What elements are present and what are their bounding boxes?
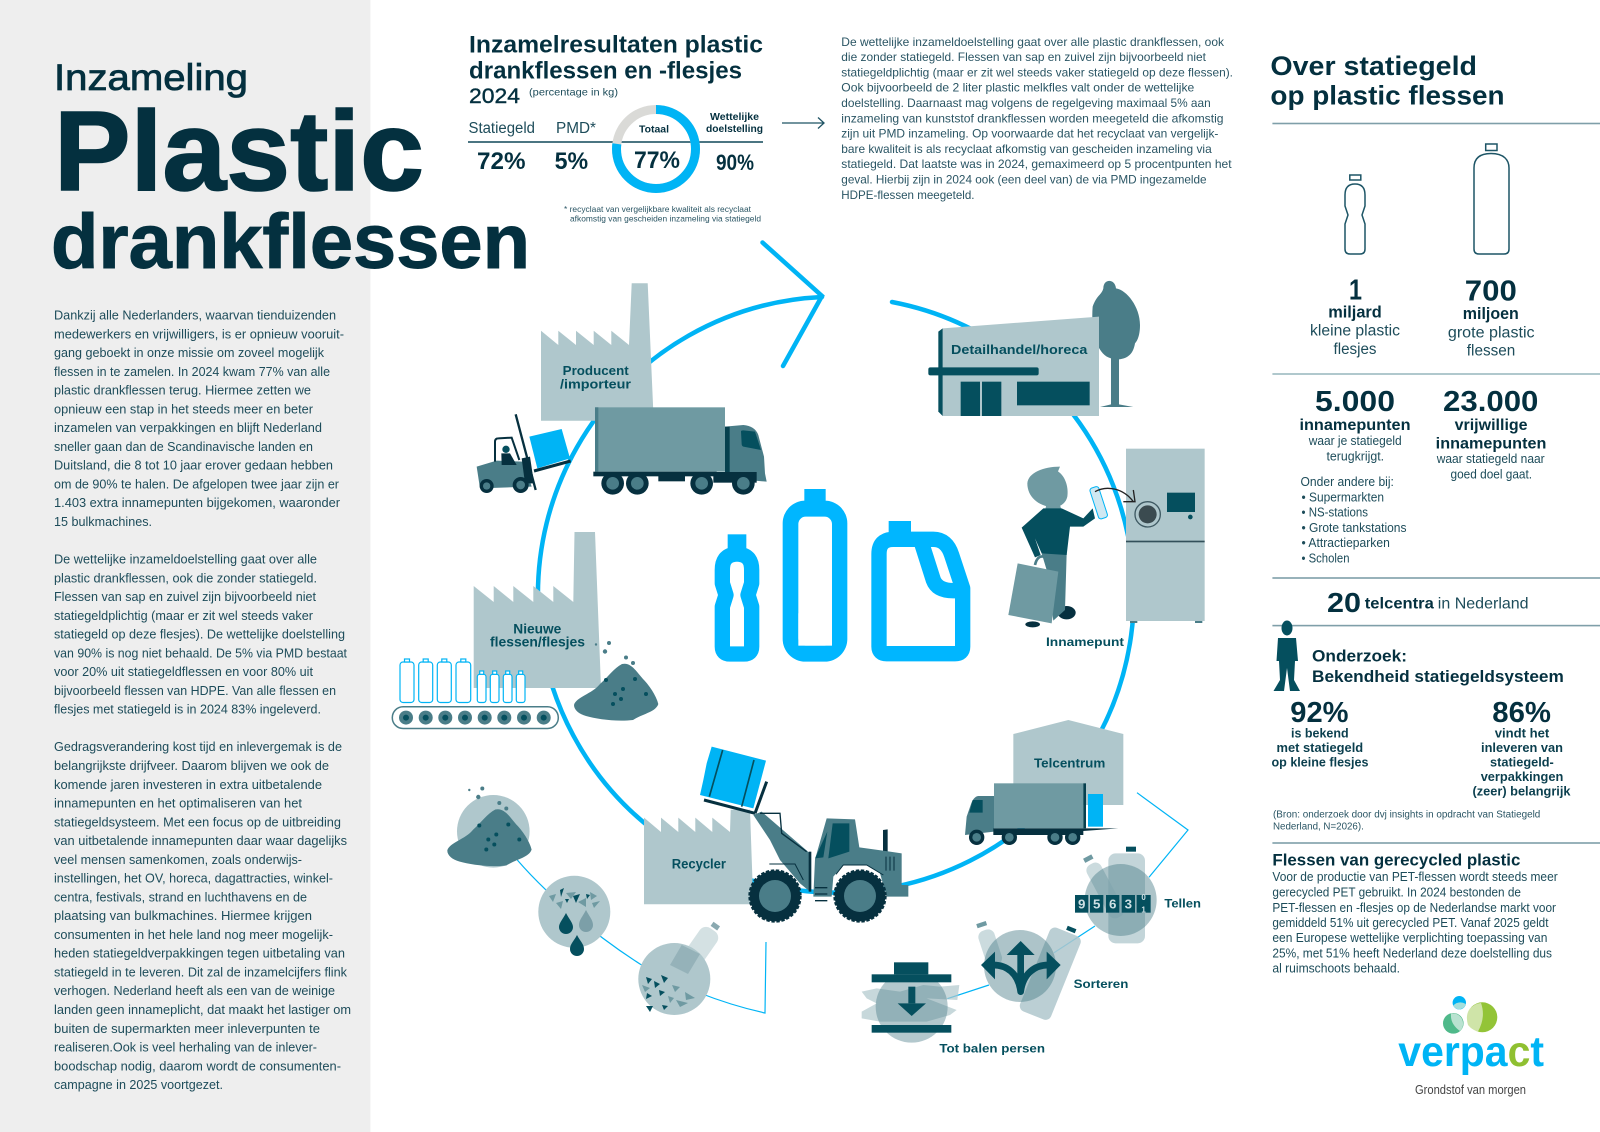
panel: new bottles factory: Nieuwe (513, 622, 562, 636)
text block: legal target explanation: De wettelijke inzameldoelstelling gaat over alle plastic drankflessen, ook (841, 35, 1224, 49)
text block: recycled plastic bottles (1272, 851, 1558, 976)
footnote (564, 204, 761, 223)
icon: counting step: 0 (1141, 893, 1146, 902)
text block: intro article: opnieuw een stap in het steeds meer en beter (54, 401, 314, 416)
text block: intro article: 15 bulkmachines. (54, 514, 152, 529)
icon: baling press step: Tot balen persen (939, 1041, 1045, 1055)
list: where to return: Onder andere bij: (1300, 475, 1394, 489)
text block: intro article: belangrijkste drijfveer. Daarom blijven we ook de (54, 758, 329, 773)
text block: intro article: plastic drankflessen terug. Hiermee zetten we (54, 383, 311, 398)
text block: legal target explanation: bare kwaliteit is als recyclaat afkomstig van gescheiden inzameling via (841, 142, 1212, 156)
panel: producer factory (541, 283, 654, 421)
panel: left grey background (0, 0, 370, 1132)
icon: forklift (477, 414, 571, 493)
text block: intro article: centra, festivals, strand en luchthavens en de (54, 889, 307, 904)
arrow: results to explanation (782, 118, 824, 128)
text block: legal target explanation: doelstelling. Daarnaast mag volgens de regelgeving maximaal 5% aan (841, 96, 1211, 110)
text block: intro article: om de 90% te halen. De afgelopen twee jaar zijn er (54, 476, 340, 491)
footnote: afkomstig van gescheiden inzameling via statiegeld (570, 213, 761, 223)
text block: legal target explanation: statiegeldplichtig (maar er zit wel steeds vaker statiegeld op deze flessen). (841, 65, 1233, 79)
text block: intro article: Flessen van sap en zuivel zijn bijvoorbeeld niet (54, 589, 316, 604)
text block: intro article: innamepunten en het optimaliseren van het (54, 796, 302, 810)
text block: intro article: boodschap nodig, daarom wordt de consumenten- (54, 1058, 341, 1073)
text block: intro article: Gedragsverandering kost tijd en inlevergemak is de (54, 739, 342, 754)
text block: legal target explanation: statiegeld. Dat laatste was in 2024, gemaximeerd op 5 procentpunten het (841, 157, 1232, 171)
icon: baling press step (862, 962, 1045, 1055)
text block: legal target explanation: zijn uit PMD inzameling. Op voorwaarde dat het recyclaat van vergelijk- (841, 127, 1218, 141)
text block: legal target explanation: HDPE-flessen meegeteld. (841, 188, 974, 202)
stat: 1 miljard: flesjes (1334, 341, 1377, 358)
text block: intro article: komende jaren investeren in extra uitbetalende (54, 777, 322, 792)
text block: legal target explanation (841, 35, 1233, 202)
stat: 92%: 92% (1290, 697, 1349, 729)
footnote: * recyclaat van vergelijkbare kwaliteit als recyclaat (564, 204, 752, 214)
icon: person (1274, 620, 1300, 691)
heading: collection results: (percentage in kg) (529, 86, 618, 98)
text block: intro article: statiegeld op deze flesjes). De wettelijke doelstelling (54, 627, 345, 642)
heading: collection results: drankflessen en -flesjes (469, 58, 742, 85)
stat: 86%: verpakkingen (1481, 769, 1563, 784)
text block: recycled plastic bottles: al ruimschoots behaald. (1272, 960, 1400, 976)
stat: 700 miljoen: grote plastic (1448, 324, 1535, 342)
text block: intro article: flessen in te zamelen. In 2024 kwam 77% van alle (54, 364, 330, 379)
stat: 86%: 86% (1492, 697, 1551, 729)
text block: legal target explanation: inzameling van kunststof drankflessen worden meegeteld die afkomstig (841, 111, 1224, 125)
text block: intro article: statiegeld in te leveren. Dit zal de inzamelcijfers flink (54, 964, 348, 980)
stat: 92% (1272, 697, 1368, 770)
text block: recycled plastic bottles: Flessen van gerecycled plastic (1272, 851, 1520, 870)
panel: recycler factory (644, 810, 753, 904)
text block: recycled plastic bottles: een Europese wettelijke verplichting toepassing van (1272, 930, 1547, 945)
source note: Nederland, N=2026). (1273, 822, 1364, 832)
panel: producer factory: Producent (563, 363, 629, 378)
icon: person returning bottle (1008, 467, 1135, 649)
text block: recycled plastic bottles: 25%, met 51% heeft Nederland deze doelstelling dus (1272, 945, 1552, 960)
stat: 1 miljard (1310, 275, 1400, 358)
text block: intro article: verhogen. Nederland heeft als een van de weinige (54, 983, 335, 998)
cycle ring with arrowhead (538, 242, 1134, 893)
icon: counting step: Tellen (1164, 897, 1201, 911)
heading: about deposit: Over statiegeld (1270, 51, 1477, 81)
stat: 23.000 voluntary points: vrijwillige (1455, 417, 1528, 434)
icon: shredding bottle circle (638, 918, 725, 1015)
panel: new bottles factory (474, 532, 601, 688)
text block: intro article: plaatsing van bulkmachines. Hiermee krijgen (54, 908, 312, 923)
stat: 20 counting centres (1327, 587, 1529, 618)
stat: 86% (1472, 697, 1571, 798)
logo: verpact: Grondstof van morgen (1415, 1083, 1526, 1097)
text block: intro article: medewerkers en vrijwilligers, is er opnieuw vooruit- (54, 326, 344, 341)
list: where to return: • Supermarkten (1302, 490, 1384, 504)
list: where to return: • Grote tankstations (1302, 521, 1406, 535)
text block: intro article: realiseren.Ook is veel herhaling van de inlever- (54, 1040, 317, 1054)
stat: 700 miljoen: 700 (1465, 275, 1517, 307)
text block: intro article: van uitbetalende innamepunten daar waar dagelijks (54, 833, 347, 848)
source note: (Bron: onderzoek door dvj insights in opdracht van Statiegeld (1273, 810, 1540, 821)
heading: survey: Onderzoek: (1312, 647, 1407, 666)
stat: 1 miljard: kleine plastic (1310, 323, 1400, 340)
logo: verpact: verpact (1398, 1028, 1544, 1076)
text block: intro article: plastic drankflessen, ook die zonder statiegeld. (54, 570, 317, 585)
panel: counting centre with truck (965, 720, 1123, 845)
text block: intro article: 1.403 extra innamepunten bijgekomen, waaronder (54, 495, 341, 510)
panel: retail shop with tree: Detailhandel/horeca (951, 342, 1088, 357)
stat: 23.000 voluntary points: waar statiegeld naar (1436, 452, 1545, 466)
icon: small bottle outline (1345, 175, 1365, 254)
icon: person returning bottle: Innamepunt (1046, 635, 1124, 649)
icon: counting step (1075, 847, 1201, 943)
text block: intro article: statiegeldplichtig (maar er zit wel steeds vaker (54, 608, 314, 623)
list: where to return: • Attractieparken (1302, 536, 1390, 550)
heading: collection results: 2024 (469, 85, 520, 108)
stat: 86%: (zeer) belangrijk (1472, 784, 1571, 798)
text block: intro article: campagne in 2025 voortgezet. (54, 1077, 223, 1092)
icon: washing circle with pile (447, 786, 532, 868)
icon: conveyor with bottles (392, 659, 558, 728)
stat: 5.000 collection points: innamepunten (1300, 417, 1410, 434)
text block: intro article: buiten de supermarkten meer inleverpunten te (54, 1021, 320, 1036)
panel: recycler factory: Recycler (672, 856, 727, 872)
text block: intro article: veel mensen samenkomen, zoals onderwijs- (54, 852, 302, 867)
stat: 700 miljoen: miljoen (1463, 305, 1519, 323)
stat: 1 miljard: 1 (1349, 275, 1362, 307)
text block: recycled plastic bottles: Voor de productie van PET-flessen wordt steeds meer (1272, 869, 1558, 884)
text block: legal target explanation: die zonder statiegeld. Flessen van sap en zuivel zijn bijvoorbeeld niet (841, 50, 1207, 64)
stat: 5.000 collection points: terugkrijgt. (1326, 450, 1384, 464)
results table with donut: doelstelling (706, 123, 763, 135)
text block: legal target explanation: geval. Hierbij zijn in 2024 ook (een deel van) de via PMD ingezamelde (841, 172, 1207, 186)
logo: verpact (1398, 996, 1544, 1097)
stat: 92%: op kleine flesjes (1272, 754, 1368, 770)
stat: 700 miljoen: flessen (1467, 343, 1515, 360)
text block: recycled plastic bottles: gemiddeld 51% uit gerecycled PET. Vanaf 2025 geldt (1272, 915, 1549, 930)
stat: 23.000 voluntary points: 23.000 (1443, 386, 1538, 418)
stat: 86%: statiegeld- (1490, 754, 1554, 770)
results table with donut (468, 110, 763, 188)
stat: 23.000 voluntary points (1436, 386, 1546, 482)
icon: sorting step (974, 920, 1128, 1022)
icon: wheel loader with bale (700, 747, 908, 921)
results table with donut: PMD* (556, 120, 596, 137)
panel: new bottles factory: flessen/flesjes (490, 634, 585, 650)
icon: counting step: 3 (1125, 897, 1132, 912)
icon: flakes and water drops circle (538, 876, 610, 956)
stat: 23.000 voluntary points: innamepunten (1436, 435, 1546, 452)
stat: 20 counting centres: in Nederland (1438, 596, 1529, 613)
text block: recycled plastic bottles: PET-flessen en -flesjes op de Nederlandse markt voor (1272, 900, 1557, 915)
heading: collection results (469, 32, 763, 108)
heading: survey: Bekendheid statiegeldsysteem (1312, 667, 1564, 686)
text block: intro article: instellingen, het OV, horeca, dagattracties, winkel- (54, 871, 333, 886)
text block: intro article: gang geboekt in onze missie om zoveel mogelijk (54, 345, 325, 360)
title (51, 57, 530, 285)
text block: intro article: voor 20% uit statiegeldflessen en voor 80% uit (54, 664, 313, 679)
panel: counting centre with truck: Telcentrum (1034, 756, 1105, 771)
title: drankflessen (51, 199, 530, 285)
text block: intro article: consumenten in het hele land nog meer mogelijk- (54, 927, 333, 942)
title: Plastic (54, 88, 424, 214)
text block: intro article: Duitsland, die 8 tot 10 jaar erover gedaan hebben (54, 458, 333, 473)
stat: 700 miljoen (1448, 275, 1535, 360)
results table with donut: 72% (477, 148, 526, 175)
icon: sorting step: Sorteren (1074, 977, 1128, 991)
stat: 20 counting centres: 20 (1327, 587, 1361, 618)
icon: delivery truck (593, 407, 767, 495)
heading: survey (1312, 647, 1564, 686)
text block: intro article: bijvoorbeeld flessen van HDPE. Van alle flessen en (54, 683, 336, 698)
panel: reverse vending machine (1126, 449, 1205, 623)
heading: about deposit: op plastic flessen (1270, 80, 1505, 110)
stat: 23.000 voluntary points: goed doel gaat. (1450, 468, 1532, 482)
results table with donut: Totaal (639, 124, 669, 136)
stat: 5.000 collection points: waar je statiegeld (1308, 434, 1402, 448)
text block: intro article (54, 308, 351, 1092)
panel: retail shop with tree (928, 281, 1140, 416)
text block: intro article: sneller gaan dan de Scandinavische landen en (54, 439, 313, 454)
text block: legal target explanation: Ook bijvoorbeeld de 2 liter plastic melkfles valt onder de wettelijke (841, 81, 1195, 95)
icon: granulate pile (574, 641, 658, 721)
icon: counting step: 6 (1109, 897, 1116, 912)
results table with donut: 5% (555, 148, 588, 175)
results table with donut: 77% (634, 147, 680, 174)
icon: large bottle outline (1474, 144, 1509, 254)
list: where to return (1300, 475, 1406, 566)
results table with donut: 90% (716, 150, 754, 175)
icon: counting step: 9 (1078, 897, 1085, 912)
results table with donut: Statiegeld (468, 120, 535, 137)
panel: producer factory: /importeur (560, 376, 631, 391)
title: Inzameling (54, 57, 248, 98)
recycling side-loop line (517, 793, 1188, 1013)
text block: intro article: inzamelen van verpakkingen en blijft Nederland (54, 420, 322, 435)
text block: intro article: landen geen innameplicht, dat maakt het lastiger om (54, 1002, 351, 1017)
list: where to return: • Scholen (1302, 552, 1350, 566)
stat: 86%: inleveren van (1481, 740, 1563, 755)
source note (1273, 810, 1540, 832)
stat: 20 counting centres: telcentra (1365, 596, 1434, 613)
text block: intro article: van 90% is nog niet behaald. De 5% via PMD bestaat (54, 645, 347, 660)
stat: 5.000 collection points: 5.000 (1315, 386, 1395, 418)
stat: 5.000 collection points (1300, 386, 1410, 464)
stat: 86%: vindt het (1495, 726, 1550, 740)
stat: 92%: met statiegeld (1276, 740, 1363, 755)
text block: intro article: statiegeldsysteem. Met een focus op de uitbreiding (54, 814, 341, 829)
list: where to return: • NS-stations (1302, 506, 1368, 520)
icon: counting step: 5 (1093, 897, 1101, 912)
text block: intro article: heden statiegeldverpakkingen tegen uitbetaling van (54, 946, 345, 961)
results table with donut: Wettelijke (710, 111, 759, 123)
stat: 1 miljard: miljard (1328, 304, 1382, 322)
stat: 92%: is bekend (1291, 726, 1349, 740)
icon: three blue bottles (722, 489, 963, 662)
text block: intro article: De wettelijke inzameldoelstelling gaat over alle (54, 552, 317, 566)
heading: collection results: Inzamelresultaten plastic (469, 32, 763, 58)
heading: about deposit (1270, 51, 1505, 110)
text block: intro article: Dankzij alle Nederlanders, waarvan tienduizenden (54, 308, 336, 322)
text block: intro article: flesjes met statiegeld is in 2024 83% ingeleverd. (54, 702, 321, 717)
icon: counting step: 1 (1141, 905, 1146, 914)
text block: recycled plastic bottles: gerecycled PET gebruikt. In 2024 bestonden de (1272, 884, 1521, 899)
